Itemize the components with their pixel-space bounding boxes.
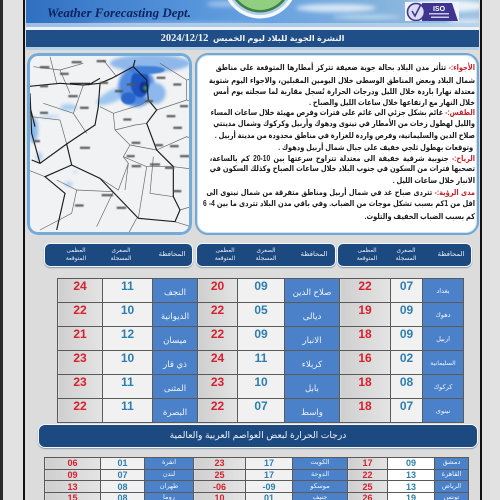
table: Iraqi provinces temperatures: 10 xyxy=(254,375,268,389)
panel: forecast text xyxy=(195,53,479,235)
outer dark edge xyxy=(0,0,3,500)
table: Iraqi provinces temperatures: الانبار xyxy=(302,335,322,345)
table: capitals temperatures: 09 xyxy=(406,458,416,468)
table: Iraqi provinces temperatures: 16 xyxy=(358,351,372,365)
table: Iraqi provinces temperatures: 05 xyxy=(254,303,268,317)
table: capitals temperatures: دمشق xyxy=(443,459,460,466)
table: Iraqi provinces temperatures: نينوى xyxy=(436,408,450,415)
table header: group 2 xyxy=(196,243,336,267)
table header: group 1: العظمى xyxy=(66,248,86,254)
header title: Weather Forecasting Dept. xyxy=(47,5,191,20)
table: capitals temperatures: 08 xyxy=(117,482,128,492)
table header: group 3: المتوقعة xyxy=(357,256,377,262)
header banner xyxy=(26,0,479,27)
table: Iraqi provinces temperatures: 07 xyxy=(400,399,413,413)
table: Iraqi provinces temperatures: 11 xyxy=(121,375,134,389)
ISO badge: ISO xyxy=(433,6,446,13)
table header: group 2: الصغرى xyxy=(257,248,275,254)
table: Iraqi provinces temperatures: 19 xyxy=(358,303,372,317)
table: capitals temperatures: 17 xyxy=(362,458,372,468)
table header: group 3: العظمى xyxy=(357,248,377,254)
table: Iraqi provinces temperatures: واسط xyxy=(301,407,323,417)
forecast text block: صلاح الدين والسليمانية، وفرص واردة للغزارة في مناطق محدودة من مدينة أربيل . xyxy=(215,131,475,140)
table: Iraqi provinces temperatures: ميسان xyxy=(163,335,187,345)
forecast text block: الطقس:- غائم بشكل جزئي الى غائم على فترات وفرص مهيئة خلال ساعات المساء xyxy=(211,108,475,117)
table: Iraqi provinces temperatures: 22 xyxy=(358,279,372,293)
table header: group 1: المسجلة xyxy=(111,256,131,262)
table: Iraqi provinces temperatures xyxy=(57,278,464,423)
table: Iraqi provinces temperatures: 23 xyxy=(73,375,87,389)
table: Iraqi provinces temperatures: 12 xyxy=(121,327,134,341)
forecast text block: كم بسبب الضباب الخفيف والتلوث. xyxy=(365,212,475,221)
table: capitals temperatures: 13 xyxy=(67,482,78,492)
rain areas xyxy=(29,55,190,187)
table: capitals temperatures: 09 xyxy=(67,470,78,480)
forecast text block: الانبار خلال ساعات الليل . xyxy=(393,176,475,185)
forecast text block: خلال النهار مع ارتفاعها خلال ساعات الليل والصباح . xyxy=(309,98,475,107)
table: Iraqi provinces temperatures: 11 xyxy=(255,351,267,365)
table header: group 2: المسجلة xyxy=(256,256,276,262)
table header: group 1: الصغرى xyxy=(112,248,130,254)
forecast text block: الأجواء:- تتأثر مدن البلاد بحالة جوية ضعيفة تتركز أمطارها المتوقعة على مناطق xyxy=(216,63,475,72)
table: Iraqi provinces temperatures: 09 xyxy=(254,279,268,293)
table header: group 2: المتوقعة xyxy=(215,256,235,262)
title band xyxy=(26,30,479,47)
table: capitals temperatures: الكويت xyxy=(310,459,330,466)
cloud streaks xyxy=(26,0,479,27)
table: Iraqi provinces temperatures: الديوانية xyxy=(161,311,189,321)
table: capitals temperatures: الرياض xyxy=(442,483,461,490)
table header: group 3: المحافظة xyxy=(438,251,464,258)
banner: capitals heading: درجات الحرارة لبعض العواصم العربية والعالمية xyxy=(170,430,346,440)
table: Iraqi provinces temperatures: اربيل xyxy=(436,336,450,343)
table: capitals temperatures: 13 xyxy=(406,470,416,480)
table: capitals temperatures: 23 xyxy=(214,458,224,468)
table: capitals temperatures: 25 xyxy=(362,482,372,492)
table: Iraqi provinces temperatures: بابل xyxy=(305,383,319,393)
table: Iraqi provinces temperatures: 10 xyxy=(121,351,134,365)
table header: group 3 xyxy=(337,243,472,267)
table: capitals temperatures: 22 xyxy=(362,470,372,480)
table: Iraqi provinces temperatures: 23 xyxy=(211,375,224,389)
ISO badge xyxy=(405,2,459,21)
country borders xyxy=(26,60,180,230)
table: Iraqi provinces temperatures: 22 xyxy=(73,303,87,317)
table: capitals temperatures: 25 xyxy=(214,470,224,480)
table: Iraqi provinces temperatures: 23 xyxy=(73,351,87,365)
forecast text block: الرياح:- جنوبية شرقية خفيفة الى معتدلة تتراوح سرعتها بين 10-20 كم بالساعة، xyxy=(210,154,475,163)
light rule under band xyxy=(26,47,479,50)
table: Iraqi provinces temperatures: 07 xyxy=(254,399,268,413)
table header: group 1: المحافظة xyxy=(159,251,185,258)
table header: group 1: المتوقعة xyxy=(66,256,86,262)
table: Iraqi provinces temperatures: 07 xyxy=(400,279,413,293)
table: Iraqi provinces temperatures: دهوك xyxy=(435,312,451,319)
table: Iraqi provinces temperatures: 22 xyxy=(211,303,224,317)
table: Iraqi provinces temperatures: 09 xyxy=(400,327,413,341)
forecast text block: تصحبها فترات من السكون في جنوب البلاد خلال ساعات الصباح وكذلك السكون في xyxy=(210,164,475,173)
table: Iraqi provinces temperatures: كركوك xyxy=(434,384,452,391)
table: capitals temperatures: انقرة xyxy=(162,459,176,466)
table: capitals temperatures xyxy=(44,457,469,500)
table: capitals temperatures: 13 xyxy=(406,482,416,492)
forecast text block: اقل من 1كم بسبب تشكل موجات من الضباب. وفي باقي مدن البلاد تتردى ما بين 4- 6 xyxy=(203,199,475,208)
table: Iraqi provinces temperatures: كربلاء xyxy=(302,359,322,369)
table: Iraqi provinces temperatures: 21 xyxy=(73,327,87,341)
table: Iraqi provinces temperatures: 11 xyxy=(121,279,134,293)
table: Iraqi provinces temperatures: 22 xyxy=(73,399,87,413)
table: Iraqi provinces temperatures: المثنى xyxy=(164,383,186,393)
table header: group 2: المحافظة xyxy=(301,251,327,258)
table: capitals temperatures: طهران xyxy=(160,483,178,490)
table: Iraqi provinces temperatures: 18 xyxy=(358,399,372,413)
forecast text block: معتدلة نهارا باردة خلال الليل ودرجات الحرارة تُسجل مقاربة لما سجلته يوم أمس xyxy=(213,87,475,96)
map frame xyxy=(27,53,192,235)
table: capitals temperatures: -06 xyxy=(213,482,226,492)
table: Iraqi provinces temperatures: 22 xyxy=(211,327,224,341)
table header: group 2: العظمى xyxy=(215,248,235,254)
table: Iraqi provinces temperatures: ديالى xyxy=(303,311,321,321)
table: Iraqi provinces temperatures: صلاح الدين xyxy=(293,287,331,297)
table: Iraqi provinces temperatures: بغداد xyxy=(436,288,450,295)
table header: group 3: المسجلة xyxy=(396,256,416,262)
table: Iraqi provinces temperatures: 08 xyxy=(400,375,413,389)
table: capitals temperatures: 17 xyxy=(264,470,274,480)
table: Iraqi provinces temperatures: 11 xyxy=(121,399,134,413)
forecast text block: شمال البلاد وبعض المناطق الوسطى خلال اليومين المقبلين، والاجواء اليوم شتوية xyxy=(209,76,475,85)
table: Iraqi provinces temperatures: النجف xyxy=(164,287,186,297)
table: Iraqi provinces temperatures: 20 xyxy=(211,279,224,293)
table: capitals temperatures: 06 xyxy=(67,458,78,468)
forecast text block: وتوقعات بهطول ثلجي خفيف على جبال شمال أربيل ودهوك . xyxy=(278,143,473,152)
table: capitals temperatures: -09 xyxy=(262,482,276,492)
panel: weather map xyxy=(27,53,192,235)
forecast text block xyxy=(203,62,475,221)
table: Iraqi provinces temperatures: السليمانية xyxy=(430,360,456,367)
table: capitals temperatures: الدوحة xyxy=(311,471,329,478)
table: Iraqi provinces temperatures: 24 xyxy=(73,279,87,293)
forecast text block: مدى الرؤية:- تتردى صباح غد في شمال أربيل ومناطق متفرقة من شمال نينوى الى xyxy=(206,188,475,197)
table: Iraqi provinces temperatures: 18 xyxy=(358,327,372,341)
table: Iraqi provinces temperatures: ذي قار xyxy=(163,359,187,369)
table: Iraqi provinces temperatures: 18 xyxy=(358,375,372,389)
table: capitals temperatures: لندن xyxy=(163,471,175,478)
table: Iraqi provinces temperatures: 22 xyxy=(211,399,224,413)
table: Iraqi provinces temperatures: البصرة xyxy=(163,407,187,417)
table: Iraqi provinces temperatures: 02 xyxy=(400,351,413,365)
table: capitals temperatures: القاهرة xyxy=(442,471,461,478)
forecast text block: والليل لهطول زخات من الأمطار في نينوى ودهوك وأربيل وكركوك وشمال مدينتي xyxy=(213,119,475,128)
table: capitals temperatures: 01 xyxy=(117,458,128,468)
table: capitals temperatures: موسكو xyxy=(310,483,330,490)
table: capitals temperatures: 17 xyxy=(264,458,274,468)
table: Iraqi provinces temperatures: 24 xyxy=(211,351,224,365)
title band: النشرة الجوية للبلاد ليوم الخميس 2024/12/12 xyxy=(161,33,344,44)
province boundaries xyxy=(20,57,227,237)
table: Iraqi provinces temperatures: 09 xyxy=(400,303,413,317)
table header: group 3: الصغرى xyxy=(397,248,415,254)
banner: capitals heading xyxy=(38,424,478,448)
table: Iraqi provinces temperatures: 10 xyxy=(121,303,134,317)
table: capitals temperatures: 07 xyxy=(117,470,128,480)
logo emblem xyxy=(228,0,292,18)
table header: group 1 xyxy=(44,243,193,267)
table: Iraqi provinces temperatures: 09 xyxy=(254,327,268,341)
city labels xyxy=(33,60,189,209)
white rule xyxy=(26,27,479,30)
